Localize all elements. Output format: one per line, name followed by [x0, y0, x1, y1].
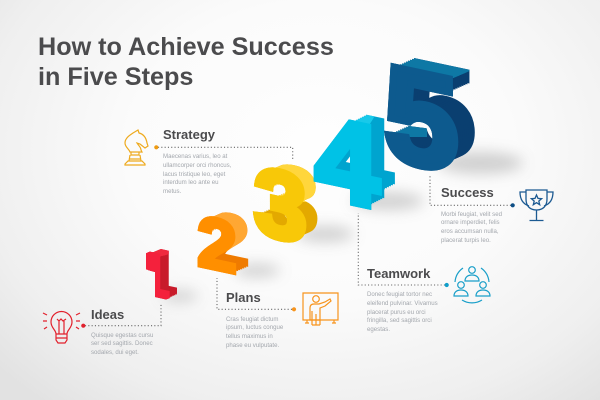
- text: success: ornare imperdiet, felis: [441, 219, 500, 226]
- heading: success: Success: [441, 185, 494, 200]
- text: teamwork: fringilla, sed sagittis orci: [367, 317, 432, 324]
- number 5: 5: [384, 36, 459, 201]
- icon: trophy: [519, 189, 554, 222]
- heading: strategy: Strategy: [163, 127, 215, 142]
- number 1: 1: [136, 238, 169, 312]
- number 4: 4: [315, 90, 380, 233]
- number 4: 4: [315, 90, 380, 233]
- panel: plans: [216, 278, 339, 349]
- icon: presentation board: [302, 292, 339, 326]
- number 5: 5: [384, 36, 459, 201]
- text: plans: tellus maximus in: [226, 333, 273, 340]
- text: plans: [226, 316, 283, 349]
- title: [38, 33, 334, 91]
- number 4: 4: [315, 90, 380, 233]
- text: strategy: Maecenas varius, leo at: [163, 153, 227, 160]
- connector: strategy: [154, 145, 294, 159]
- text: strategy: interdum leo ante eu: [163, 179, 219, 186]
- text: teamwork: Donec feugiat tortor nec: [367, 291, 432, 298]
- text: ideas: ser sed sagittis. Donec: [91, 340, 153, 347]
- text: strategy: ullamcorper orci rhoncus,: [163, 162, 231, 169]
- panel: ideas: [42, 304, 162, 356]
- shadow: number 3: [296, 226, 354, 242]
- icon: team: [453, 266, 491, 304]
- text: strategy: [163, 153, 231, 195]
- number 2: 2: [197, 201, 237, 290]
- text: plans: ipsum, luctus congue: [226, 324, 283, 331]
- shadow: number 2: [234, 264, 280, 277]
- panel: success: [429, 176, 554, 244]
- text: ideas: [91, 332, 153, 356]
- text: ideas: sodales, dui eget.: [91, 349, 139, 356]
- number 1: 1: [136, 238, 169, 312]
- text: success: Morbi feugiat, velit sed: [441, 211, 502, 218]
- panel: teamwork: [358, 213, 491, 333]
- title: in Five Steps: [38, 63, 193, 91]
- text: success: eros accumsan nulla,: [441, 228, 499, 235]
- shadow: number 1: [162, 291, 198, 301]
- text: success: [441, 211, 502, 244]
- shadow: number 5: [438, 152, 523, 174]
- number 5: 5: [384, 36, 459, 201]
- number 5: 5: [384, 36, 459, 201]
- number 2: 2: [197, 201, 237, 290]
- heading: teamwork: Teamwork: [367, 266, 430, 281]
- connector: plans: [216, 278, 296, 312]
- number 3: 3: [254, 147, 306, 264]
- connector: success: [429, 176, 515, 208]
- icon: chess knight: [124, 129, 149, 166]
- text: success: placerat turpis leo.: [441, 237, 491, 244]
- number 3: 3: [254, 147, 306, 264]
- text: strategy: metus.: [163, 188, 181, 195]
- panel: strategy: [124, 127, 294, 195]
- icon: light bulb: [42, 310, 80, 344]
- text: teamwork: placerat purus eu orci: [367, 309, 426, 316]
- title: How to Achieve Success: [38, 33, 334, 61]
- text: teamwork: [367, 291, 438, 333]
- shadow: number 4: [352, 192, 424, 210]
- number 2: 2: [197, 201, 237, 290]
- connector: teamwork: [358, 213, 449, 288]
- connector: ideas: [81, 304, 162, 328]
- number 1: 1: [136, 238, 169, 312]
- text: teamwork: eleifend pulvinar. Vivamus: [367, 300, 438, 307]
- number 1: [146, 249, 177, 300]
- text: plans: Cras feugiat dictum: [226, 316, 278, 323]
- heading: ideas: Ideas: [91, 307, 124, 322]
- number 3: 3: [254, 147, 306, 264]
- text: plans: phase eu vulputate.: [226, 342, 279, 349]
- heading: plans: Plans: [226, 290, 261, 305]
- text: ideas: Quisque egestas cursu: [91, 332, 153, 339]
- text: strategy: lacus tristique leo, eget: [163, 171, 225, 178]
- text: teamwork: egestas.: [367, 326, 390, 333]
